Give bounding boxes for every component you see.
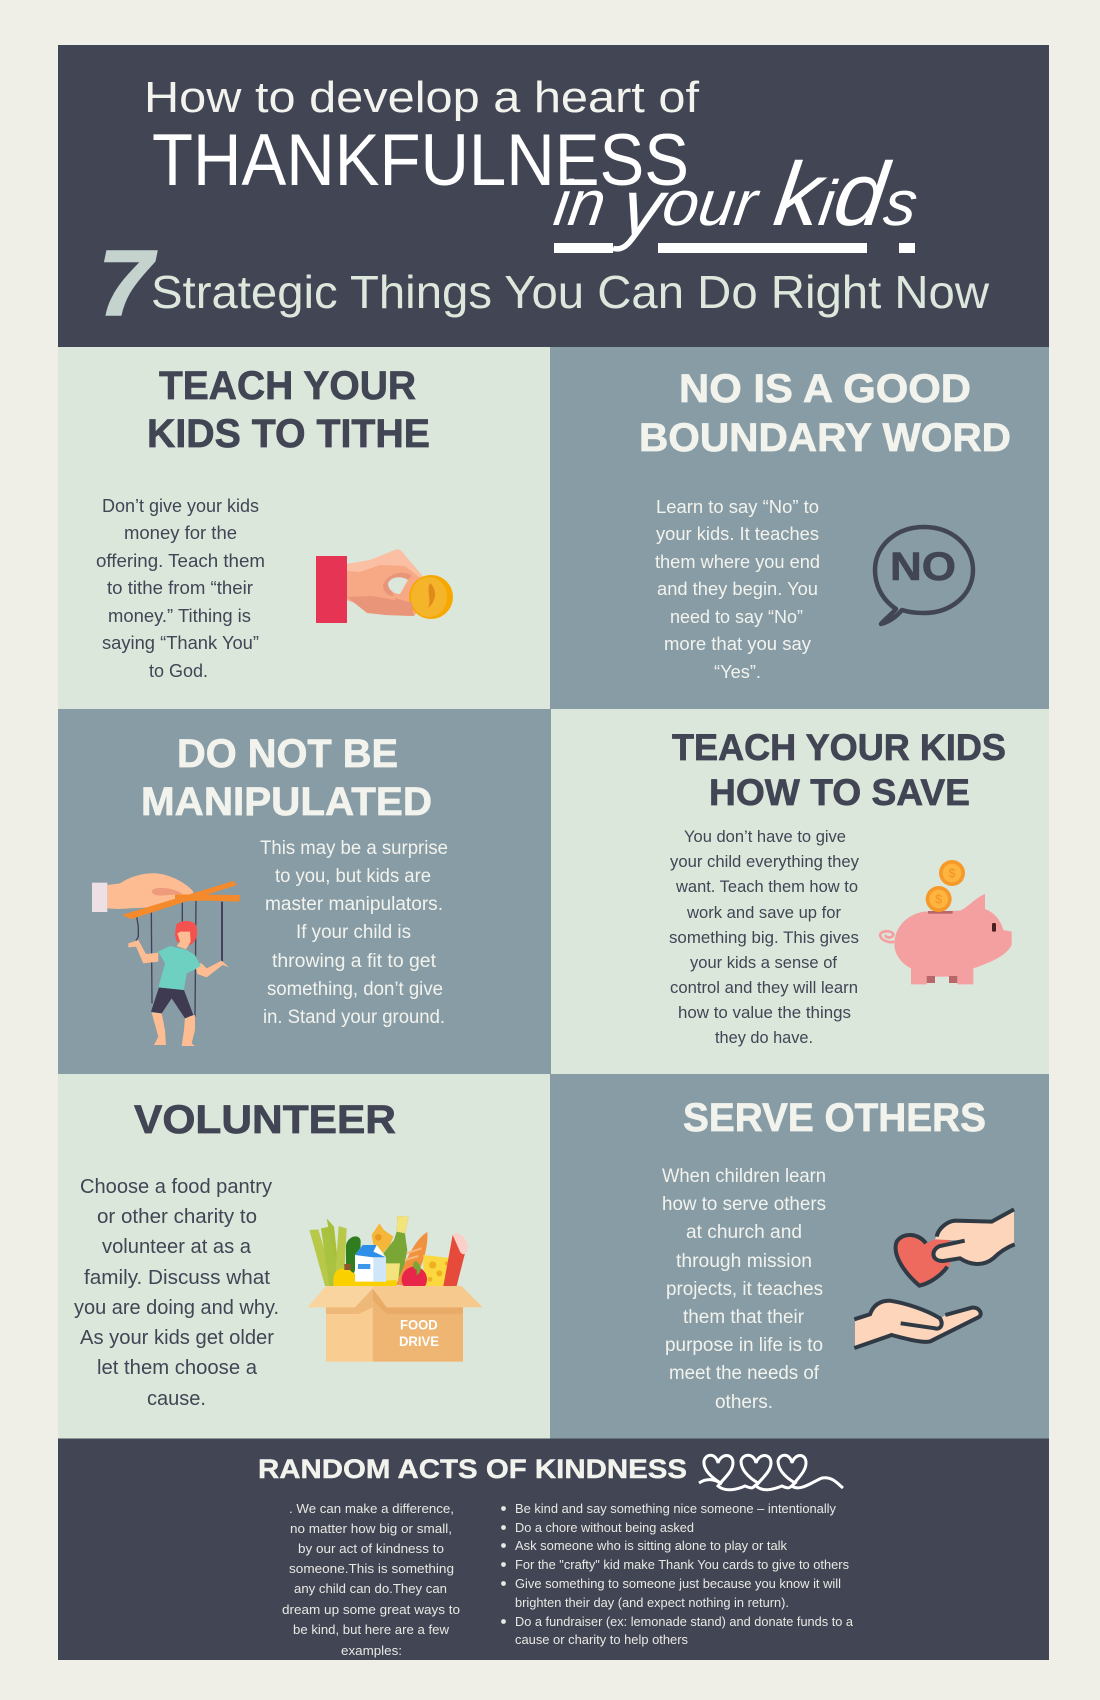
header panel: [58, 45, 1049, 347]
body text: and they begin. You: [657, 579, 818, 599]
body text: or other charity to: [97, 1206, 257, 1228]
heading: TEACH YOUR KIDS: [672, 727, 1006, 768]
heading: [147, 364, 430, 456]
intro text: someone.This is something: [289, 1561, 454, 1576]
body text: master manipulators.: [265, 894, 443, 915]
body text: your child everything they: [670, 852, 859, 871]
body text: need to say “No”: [670, 607, 803, 627]
intro text: dream up some great ways to: [282, 1602, 460, 1617]
bullet list: Ask someone who is sitting alone to play or talk: [515, 1538, 787, 1553]
heading: NO IS A GOOD: [679, 367, 971, 411]
script title: y: [611, 163, 674, 253]
panel: teach your kids to tithe: [58, 347, 550, 709]
body text: money for the: [124, 523, 237, 543]
body text: to tithe from “their: [107, 578, 253, 598]
body text: [96, 496, 265, 681]
body text: them that their: [683, 1307, 805, 1328]
bullet list: Do a fundraiser (ex: lemonade stand) and donate funds to a: [515, 1614, 854, 1629]
heading: RANDOM ACTS OF KINDNESS: [258, 1454, 687, 1484]
body text: purpose in life is to: [665, 1335, 823, 1356]
body text: If your child is: [296, 922, 411, 943]
body text: This may be a surprise: [260, 838, 448, 859]
body text: When children learn: [662, 1166, 826, 1187]
body text: throwing a fit to get: [272, 951, 437, 972]
heading: TEACH YOUR: [159, 364, 416, 408]
heading: DO NOT BE: [177, 732, 398, 776]
body text: to you, but kids are: [275, 866, 431, 887]
intro text: examples:: [341, 1643, 402, 1658]
body text: want. Teach them how to: [675, 877, 858, 896]
heading: BOUNDARY WORD: [639, 416, 1011, 460]
heading: [639, 367, 1011, 460]
icon: hearts line: [699, 1455, 843, 1490]
heading: HOW TO SAVE: [709, 772, 970, 813]
body text: [260, 838, 448, 1028]
icon: puppet on strings: [92, 873, 240, 1046]
intro text: [282, 1501, 460, 1658]
body text: [669, 827, 859, 1047]
heading: [141, 732, 432, 824]
body text: money.” Tithing is: [108, 606, 251, 626]
body text: saying “Thank You”: [102, 633, 259, 653]
bullet list: Be kind and say something nice someone – intentionally: [515, 1501, 836, 1516]
body text: something, don’t give: [267, 979, 443, 1000]
body text: they do have.: [715, 1028, 813, 1047]
intro text: no matter how big or small,: [290, 1521, 452, 1536]
underline bars: [554, 243, 915, 253]
bullet list: For the "crafty" kid make Thank You cards to give to others: [515, 1557, 849, 1572]
intro text: any child can do.They can: [294, 1581, 447, 1596]
bullet list: [501, 1501, 854, 1647]
icon: piggy bank with coins: [880, 860, 1012, 984]
body text: control and they will learn: [670, 978, 858, 997]
body text: others.: [715, 1392, 773, 1413]
body text: offering. Teach them: [96, 551, 265, 571]
icon: piggy bank with coins: $: [948, 867, 956, 881]
panel: serve others: [550, 1074, 1049, 1438]
script title: in: [550, 167, 610, 239]
script title: kids: [769, 144, 922, 245]
panel: do not be manipulated: [58, 709, 551, 1074]
body text: As your kids get older: [80, 1327, 274, 1349]
body text: you are doing and why.: [74, 1297, 279, 1319]
body text: projects, it teaches: [666, 1279, 823, 1300]
bullet list: brighten their day (and expect nothing in return).: [515, 1595, 789, 1610]
body text: how to serve others: [662, 1194, 826, 1215]
icon: hand holding coin: [316, 549, 453, 623]
body text: family. Discuss what: [84, 1267, 270, 1289]
body text: work and save up for: [686, 903, 841, 922]
big number 7: 7: [98, 231, 158, 335]
bullet list: cause or charity to help others: [515, 1632, 688, 1647]
intro text: by our act of kindness to: [298, 1541, 444, 1556]
icon: piggy bank with coins: $: [935, 893, 942, 907]
body text: Learn to say “No” to: [656, 497, 819, 517]
bullet list: Give something to someone just because you know it will: [515, 1576, 841, 1591]
body text: at church and: [686, 1222, 802, 1243]
subtitle: Strategic Things You Can Do Right Now: [151, 266, 990, 318]
body text: your kids. It teaches: [656, 524, 819, 544]
body text: let them choose a: [97, 1357, 258, 1379]
title line 1: How to develop a heart of: [144, 73, 700, 122]
body text: something big. This gives: [669, 928, 859, 947]
body text: more that you say: [664, 634, 811, 654]
body text: “Yes”.: [714, 662, 761, 682]
icon: hands giving heart: [854, 1209, 1015, 1348]
body text: to God.: [149, 661, 208, 681]
body text: Don’t give your kids: [102, 496, 259, 516]
intro text: be kind, but here are a few: [293, 1622, 450, 1637]
body text: how to value the things: [678, 1003, 851, 1022]
body text: meet the needs of: [669, 1363, 820, 1384]
body text: Choose a food pantry: [80, 1176, 272, 1198]
bullet list: Do a chore without being asked: [515, 1520, 694, 1535]
body text: in. Stand your ground.: [263, 1007, 445, 1028]
icon: food drive box: [307, 1216, 483, 1362]
panel: random acts of kindness: [58, 1438, 1049, 1660]
title line 2: THANKFULNESS: [152, 120, 689, 201]
heading: SERVE OTHERS: [683, 1096, 986, 1140]
panel: no is a good boundary word: [550, 347, 1049, 709]
body text: [74, 1176, 279, 1410]
heading: [672, 727, 1006, 813]
intro text: . We can make a difference,: [289, 1501, 454, 1516]
body text: your kids a sense of: [690, 953, 837, 972]
heading: KIDS TO TITHE: [147, 412, 430, 456]
script title: our: [658, 167, 780, 239]
body text: them where you end: [655, 552, 820, 572]
panel: teach your kids how to save: [551, 709, 1049, 1074]
icon: no speech bubble: [875, 527, 973, 624]
body text: [662, 1166, 826, 1413]
body text: through mission: [676, 1251, 812, 1272]
body text: volunteer at as a: [102, 1236, 252, 1258]
heading: VOLUNTEER: [134, 1098, 396, 1142]
icon: no speech bubble: NO: [890, 545, 956, 589]
body text: [655, 497, 820, 682]
icon: food drive box: DRIVE: [399, 1333, 439, 1349]
heading: MANIPULATED: [141, 780, 432, 824]
body text: You don’t have to give: [684, 827, 846, 846]
body text: cause.: [147, 1388, 206, 1410]
icon: food drive box: FOOD: [400, 1316, 438, 1332]
panel: volunteer: [58, 1074, 550, 1438]
